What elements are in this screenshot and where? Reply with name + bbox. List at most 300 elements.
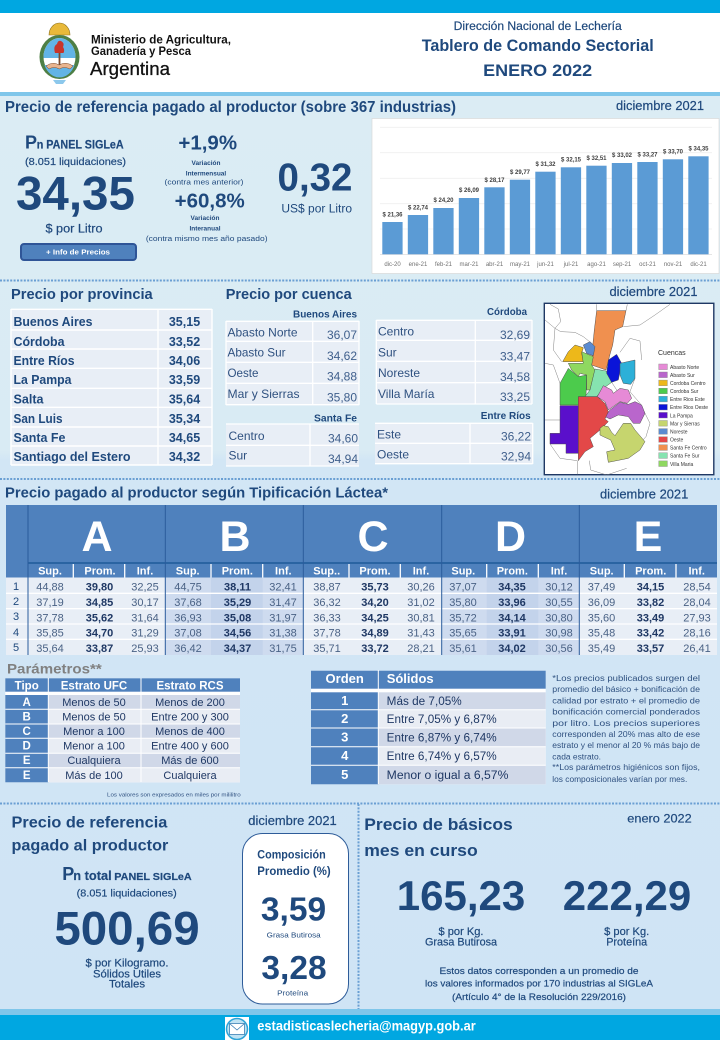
- note: data source: (Artículo 4° de la Resolución 229/2016): [452, 992, 626, 1003]
- date: section 3: diciembre 2021: [600, 487, 688, 501]
- table: Córdoba basins: Noreste: [378, 366, 420, 380]
- row 3 values: 36,93: [174, 612, 202, 624]
- footnote: price methodology: los composicionales varían por mes.: [552, 775, 687, 784]
- map: dairy basins: Mar y Sierras: [670, 421, 700, 427]
- row 1 values: 37,07: [449, 582, 477, 594]
- kpi: monthly variation: [164, 131, 244, 187]
- table: Córdoba basins: 34,58: [500, 370, 530, 384]
- footnote: price methodology: promedio del básico + bonificación de: [552, 685, 701, 694]
- kpi: price per kilogram: (8.051 liquidaciones): [77, 888, 177, 900]
- bar chart: monthly price: feb-21: [435, 262, 453, 268]
- table: price by typing: E: [634, 513, 662, 561]
- row 5 values: 31,75: [269, 643, 297, 655]
- kpi: US dollars per litre: 0,32: [278, 157, 352, 200]
- table: price by province: Buenos Aires: [14, 315, 93, 329]
- table: solids order: Más de 7,05%: [387, 696, 462, 708]
- header title: Tablero de Comando Sectorial: [422, 37, 654, 55]
- bar chart: monthly price: ene-21: [409, 262, 428, 268]
- table: price by typing: Sup.: [176, 566, 200, 578]
- table: Entre Ríos basins: Oeste: [377, 448, 409, 462]
- row 4 values: 31,43: [407, 628, 435, 640]
- table: Córdoba basins: Villa María: [378, 387, 435, 401]
- bar chart: monthly price: $ 29,77: [510, 170, 531, 176]
- row 4 values: 34,56: [224, 628, 251, 640]
- table: price by typing: Inf.: [275, 566, 292, 578]
- footer email address: estadisticaslecheria@magyp.gob.ar: [257, 1018, 476, 1034]
- heading: total reference price: Precio de referencia: [12, 814, 168, 831]
- table: Córdoba basins: [376, 306, 532, 404]
- row 2 values: 34,20: [361, 597, 389, 609]
- row 1 values: [36, 582, 711, 594]
- footnote: price methodology: estrato y el menor al 20 % más bajo de: [552, 741, 701, 750]
- table: price by province: 34,65: [169, 431, 200, 445]
- table: price by typing: Prom.: [359, 566, 391, 578]
- row 1 values: 38,11: [224, 582, 251, 594]
- map: dairy basins: Cordoba Sur: [670, 389, 699, 395]
- row 4 values: 37,78: [313, 628, 341, 640]
- kpi: protein basic price: [563, 872, 691, 949]
- header band: [0, 0, 720, 96]
- row 3 values: 34,14: [498, 612, 527, 624]
- map: dairy basins: Santa Fe Sur: [670, 454, 700, 460]
- row 1 values: 37,49: [588, 582, 615, 594]
- table: Córdoba basins: Centro: [378, 324, 414, 338]
- bar chart: monthly price: $ 21,36: [382, 212, 403, 218]
- date: section 1: diciembre 2021: [616, 99, 704, 113]
- table: price by province: Entre Ríos: [14, 354, 75, 368]
- footnote: price methodology: calidad por estrato + el promedio de: [552, 696, 701, 705]
- table: price by typing: Prom.: [84, 566, 116, 578]
- row 1 values: 32,41: [269, 582, 297, 594]
- map: dairy basins: Entre Rios Este: [670, 397, 705, 403]
- table: solids order: Menor o igual a 6,57%: [387, 770, 508, 782]
- table: solids order: Orden: [326, 671, 364, 686]
- row 4 values: 34,70: [86, 628, 113, 640]
- table: Entre Ríos basins: Este: [377, 428, 401, 442]
- bar chart: monthly price: $ 26,09: [459, 188, 480, 194]
- heading: basic prices: [364, 816, 513, 860]
- map: dairy basins: Villa Maria: [670, 462, 693, 468]
- table: parameters: E: [23, 770, 31, 782]
- row 4 values: 30,98: [545, 628, 573, 640]
- row 4 values: 35,65: [449, 628, 477, 640]
- table: price by province: 35,34: [169, 412, 200, 426]
- row 2 values: 37,68: [174, 597, 202, 609]
- row 1 values: 28,54: [683, 582, 711, 594]
- table: Santa Fe basins: Centro: [228, 429, 265, 443]
- table: price by typing: Inf.: [137, 566, 153, 578]
- icon: email: [225, 1017, 249, 1040]
- ministry wordmark: Ganadería y Pesca: [91, 44, 191, 58]
- bar chart: monthly price: $ 33,27: [637, 152, 658, 158]
- heading: price by basin: Precio por cuenca: [226, 286, 352, 303]
- bar chart: monthly price: $ 33,70: [663, 150, 684, 156]
- table: parameters: Cualquiera: [67, 755, 121, 767]
- table: price by province: Salta: [14, 392, 45, 406]
- panel: average composition: 3,28: [261, 950, 327, 987]
- table: price by province: 35,64: [169, 392, 200, 406]
- table: Córdoba basins: Sur: [378, 346, 397, 360]
- kpi: price per kilogram: $ por Kilogramo.: [86, 958, 168, 970]
- map: dairy basins: Abasto Sur: [670, 373, 695, 379]
- panel: average composition: Grasa Butirosa: [267, 931, 322, 940]
- panel: average composition: [242, 834, 348, 1004]
- row 3 values: 35,62: [86, 612, 113, 624]
- header title: Dirección Nacional de Lechería: [454, 21, 622, 33]
- table: parameters: Entre 200 y 300: [151, 712, 229, 724]
- row 1 values: 34,15: [637, 582, 664, 594]
- table: Buenos Aires basins: 35,80: [327, 390, 357, 404]
- table: price by typing: [6, 505, 717, 655]
- kpi: butterfat basic price: $ por Kg.: [438, 926, 484, 938]
- date: section 5: diciembre 2021: [248, 814, 337, 828]
- bar chart: monthly price: $ 22,74: [408, 206, 429, 212]
- table: solids order: 3: [341, 730, 348, 744]
- bar chart: monthly price: jun-21: [536, 262, 554, 268]
- footnote: price methodology: bonificación comercial ponderados: [552, 707, 700, 716]
- footnote: units: Los valores son expresados en miles por mililitro: [107, 793, 241, 799]
- kpi: price per kilogram: 500,69: [54, 902, 200, 955]
- row 5 values: 26,41: [683, 643, 711, 655]
- row 4 values: 35,48: [588, 628, 615, 640]
- table: Córdoba basins: 33,25: [500, 390, 530, 404]
- table: solids order: 2: [341, 711, 348, 726]
- table: solids order: Entre 7,05% y 6,87%: [387, 714, 497, 726]
- row 1 values: 35,73: [361, 582, 389, 594]
- map: dairy basins: Cordoba Centro: [670, 381, 706, 387]
- table: Córdoba basins: 32,69: [500, 328, 530, 342]
- panel: average composition: Composición: [257, 849, 326, 861]
- row 3 values: 34,25: [361, 612, 389, 624]
- table: Entre Ríos basins: Entre Ríos: [481, 410, 531, 422]
- row 2 values: 30,55: [545, 597, 573, 609]
- table: price by province: Córdoba: [14, 335, 66, 349]
- table: Buenos Aires basins: Abasto Norte: [228, 326, 298, 340]
- row 4 values: 37,08: [174, 628, 202, 640]
- table: price by typing: Prom.: [497, 566, 528, 578]
- table: solids order: [311, 670, 546, 784]
- table: price by province: 33,52: [169, 335, 200, 349]
- heading: total reference price: pagado al productor: [12, 838, 168, 855]
- table: Santa Fe basins: [226, 413, 359, 466]
- row 4 values: 31,38: [269, 628, 297, 640]
- kpi: butterfat basic price: Grasa Butirosa: [425, 937, 498, 949]
- table: Entre Ríos basins: 36,22: [501, 430, 531, 444]
- row 3 values: 31,97: [269, 612, 297, 624]
- heading: basic prices: Precio de básicos: [364, 816, 513, 834]
- table: Buenos Aires basins: Oeste: [228, 366, 259, 380]
- table: parameters: Cualquiera: [163, 770, 217, 782]
- table: parameters: Más de 600: [161, 755, 219, 767]
- bar chart: monthly price: nov-21: [664, 262, 683, 268]
- row 4 values: 28,16: [683, 628, 711, 640]
- footnote: price methodology: cada estrato.: [552, 752, 601, 761]
- row 2 values: 33,82: [637, 597, 664, 609]
- map: dairy basins: Oeste: [670, 438, 684, 444]
- table: parameters: Menos de 50: [62, 697, 126, 709]
- row 1 values: 44,75: [174, 582, 202, 594]
- table: price by typing: Inf.: [413, 566, 429, 578]
- row 3 values: 30,80: [545, 612, 573, 624]
- row 2 values: 37,19: [36, 597, 64, 609]
- row 1 values: 32,25: [131, 582, 159, 594]
- table: parameters: Menos de 400: [155, 726, 225, 738]
- kpi: butterfat basic price: 165,23: [397, 872, 525, 919]
- row 3 values: 35,60: [588, 612, 615, 624]
- table: price by typing: Inf.: [688, 566, 705, 578]
- row 2 values: [36, 597, 711, 609]
- heading: price by province: Precio por provincia: [11, 286, 153, 303]
- table: parameters: Entre 400 y 600: [151, 740, 229, 752]
- table: parameters: Tipo: [15, 680, 39, 692]
- ministry wordmark: [90, 32, 231, 79]
- table: price by province: 34,32: [169, 450, 200, 464]
- bar chart: monthly price: $ 33,02: [612, 153, 633, 159]
- table: price by typing: B: [219, 513, 251, 561]
- row 5 values: 35,61: [449, 643, 477, 655]
- kpi: price per kilogram: PANEL SIGLeA: [114, 871, 192, 883]
- bar chart: monthly price: ago-21: [587, 262, 607, 268]
- table: price by typing: Prom.: [635, 566, 666, 578]
- kpi: monthly variation: Variación: [192, 160, 220, 167]
- note: data source: los valores informados por 170 industrias al SIGLeA: [425, 979, 654, 990]
- row 5 values: 33,87: [86, 643, 113, 655]
- table: price by typing: Sup..: [313, 566, 340, 578]
- heading: price by milk typing: Precio pagado al productor según Tipificación Láctea*: [5, 486, 388, 502]
- row 3 values: 36,33: [313, 612, 341, 624]
- row 5 values: 30,56: [545, 643, 573, 655]
- bar chart: monthly price: sep-21: [613, 262, 632, 268]
- table: Santa Fe basins: Santa Fe: [314, 413, 357, 425]
- map: dairy basins: La Pampa: [670, 413, 693, 419]
- bar chart: monthly price: mar-21: [459, 262, 479, 268]
- bar chart: monthly price: abr-21: [486, 262, 504, 268]
- row 4 values: 34,89: [361, 628, 389, 640]
- table: price by typing: Inf.: [551, 566, 567, 578]
- row 3 values: 35,72: [449, 612, 477, 624]
- heading: total reference price: [12, 814, 168, 855]
- row 3 values: [36, 612, 711, 624]
- date: section 2: diciembre 2021: [610, 285, 698, 299]
- table: price by province: 34,06: [169, 354, 200, 368]
- table: price by province: Santa Fe: [14, 431, 66, 445]
- bar chart: monthly price: [372, 118, 719, 274]
- ministry wordmark: Argentina: [90, 59, 171, 79]
- table: Entre Ríos basins: 32,94: [501, 450, 531, 464]
- table: price by province: La Pampa: [14, 373, 73, 387]
- table: parameters: C: [23, 726, 31, 738]
- footnote: price methodology: [552, 674, 701, 784]
- row 1 values: 44,88: [36, 582, 64, 594]
- row 5 values: 25,93: [131, 643, 159, 655]
- row 3 values: 27,93: [683, 612, 711, 624]
- row 1 values: 30,26: [407, 582, 435, 594]
- bar chart: monthly price: $ 32,15: [561, 158, 582, 164]
- ministry wordmark: Ministerio de Agricultura,: [91, 32, 231, 46]
- table: parameters: E: [23, 755, 31, 767]
- row 5 values: 35,49: [588, 643, 615, 655]
- kpi: price per kilogram: [54, 864, 200, 991]
- row 2 values: 28,04: [683, 597, 711, 609]
- table: price by typing: 5: [13, 642, 19, 654]
- row 3 values: 37,78: [36, 612, 64, 624]
- row 5 values: 33,72: [361, 643, 389, 655]
- kpi: monthly variation: (contra mes anterior): [164, 180, 244, 187]
- kpi: price per kilogram: Totales: [109, 979, 146, 991]
- table: Santa Fe basins: 34,60: [328, 432, 358, 446]
- heading: parameters: Parámetros**: [7, 660, 102, 676]
- table: solids order: 4: [341, 748, 349, 763]
- kpi: annual variation: [146, 189, 268, 243]
- bar chart: monthly price: $ 24,20: [433, 198, 454, 204]
- row 1 values: 38,87: [313, 582, 341, 594]
- table: Santa Fe basins: 34,94: [328, 452, 358, 466]
- table: price by typing: 4: [13, 627, 19, 639]
- row 5 values: 35,64: [36, 643, 64, 655]
- row 3 values: 35,08: [224, 612, 251, 624]
- table: parameters: Estrato RCS: [156, 680, 224, 692]
- panel: average composition: Promedio (%): [257, 866, 331, 878]
- kpi: annual variation: (contra mismo mes año pasado): [146, 236, 268, 243]
- table: price by province: Santiago del Estero: [14, 450, 131, 464]
- row 4 values: 33,42: [637, 628, 664, 640]
- row 2 values: 36,09: [588, 597, 615, 609]
- row 5 values: 33,57: [637, 643, 664, 655]
- kpi: monthly variation: +1,9%: [178, 131, 237, 154]
- table: price by typing: Sup.: [590, 566, 614, 578]
- row 5 values: 34,37: [224, 643, 251, 655]
- table: price by province: 35,15: [169, 315, 200, 329]
- footnote: price methodology: *Los precios publicados surgen del: [552, 674, 700, 683]
- header title: [422, 21, 654, 80]
- table: Córdoba basins: Córdoba: [487, 306, 527, 318]
- table: parameters: A: [23, 697, 31, 709]
- kpi: butterfat basic price: [397, 872, 525, 949]
- footnote: price methodology: por litro. Los precios superiores: [552, 719, 700, 728]
- footnote: price methodology: corresponden al 20% mas alto de ese: [552, 730, 701, 739]
- bar chart: monthly price: $ 32,51: [586, 156, 607, 162]
- row 3 values: 31,64: [131, 612, 159, 624]
- row 4 values: 31,29: [131, 628, 159, 640]
- row 2 values: 35,80: [449, 597, 477, 609]
- table: Santa Fe basins: Sur: [228, 448, 247, 462]
- row 2 values: 31,02: [407, 597, 435, 609]
- table: price by typing: D: [495, 513, 526, 561]
- kpi: US dollars per litre: US$ por Litro: [281, 204, 352, 216]
- bar chart: monthly price: $ 31,32: [535, 162, 556, 168]
- bar chart: monthly price: $ 34,35: [688, 146, 709, 152]
- table: parameters: Menos de 200: [155, 697, 225, 709]
- note: data source: Estos datos corresponden a un promedio de: [440, 966, 638, 977]
- table: price by typing: 1: [13, 581, 19, 593]
- row 2 values: 31,47: [269, 597, 297, 609]
- map: dairy basins: Noreste: [670, 430, 688, 436]
- row 4 values: 35,85: [36, 628, 64, 640]
- bar chart: monthly price: jul-21: [563, 262, 579, 268]
- kpi: price per litre: n PANEL SIGLeA: [37, 140, 124, 152]
- row 5 values: 36,42: [174, 643, 202, 655]
- row 1 values: 34,35: [498, 582, 526, 594]
- heading: basic prices: mes en curso: [364, 842, 478, 860]
- row 5 values: 28,21: [407, 643, 435, 655]
- row 5 values: [36, 643, 711, 655]
- table: solids order: Sólidos: [387, 671, 434, 686]
- table: Buenos Aires basins: 34,62: [327, 349, 357, 363]
- table: solids order: Entre 6,74% y 6,57%: [387, 751, 497, 763]
- row 4 values: [36, 628, 711, 640]
- row 2 values: 33,96: [498, 597, 526, 609]
- table: Buenos Aires basins: Abasto Sur: [228, 346, 286, 360]
- kpi: annual variation: Interanual: [189, 226, 221, 233]
- table: Buenos Aires basins: 34,88: [327, 370, 357, 384]
- icon: national coat of arms: [40, 23, 80, 84]
- kpi: price per kilogram: P: [62, 864, 74, 884]
- table: price by typing: 3: [13, 611, 19, 623]
- table: parameters: D: [23, 740, 31, 752]
- kpi: price per litre: [16, 132, 135, 236]
- row 2 values: 30,17: [131, 597, 159, 609]
- table: parameters: Estrato UFC: [61, 680, 127, 692]
- heading: reference price: Precio de referencia pagado al productor (sobre 367 industrias): [5, 99, 456, 116]
- table: price by typing: A: [81, 513, 113, 561]
- row 2 values: 36,32: [313, 597, 341, 609]
- row 5 values: 34,02: [498, 643, 526, 655]
- date: section 6: enero 2022: [627, 812, 692, 826]
- bar chart: monthly price: may-21: [510, 262, 531, 268]
- map: dairy basins: [544, 303, 714, 475]
- kpi: protein basic price: $ por Kg.: [604, 926, 649, 938]
- bar chart: monthly price: $ 28,17: [484, 178, 505, 184]
- map: dairy basins: Santa Fe Centro: [670, 446, 707, 452]
- row 4 values: 33,91: [498, 628, 526, 640]
- kpi: protein basic price: Proteína: [606, 937, 648, 949]
- row 1 values: 30,12: [545, 582, 573, 594]
- table: price by typing: 2: [13, 596, 19, 608]
- header title: ENERO 2022: [483, 61, 592, 80]
- bar chart: monthly price: dic-20: [384, 262, 401, 268]
- table: price by province: [11, 309, 212, 465]
- table: parameters: Menos de 50: [62, 712, 126, 724]
- map: dairy basins: Entre Rios Oeste: [670, 405, 708, 411]
- table: Entre Ríos basins: [375, 410, 533, 464]
- row 3 values: 33,49: [637, 612, 664, 624]
- table: Buenos Aires basins: [226, 308, 359, 405]
- footnote: price methodology: **Los parámetros higiénicos son fijos,: [552, 763, 700, 772]
- row 5 values: 35,71: [313, 643, 341, 655]
- table: parameters: B: [23, 712, 31, 724]
- kpi: price per kilogram: n total: [73, 868, 112, 883]
- kpi: protein basic price: 222,29: [563, 872, 691, 919]
- kpi: price per litre: 34,35: [16, 168, 135, 220]
- table: price by province: San Luis: [14, 412, 63, 426]
- table: solids order: 1: [341, 693, 348, 708]
- button: more price info: [21, 244, 136, 260]
- table: Córdoba basins: 33,47: [500, 350, 530, 364]
- button: more price info: + Info de Precios: [46, 248, 110, 256]
- table: price by province: 33,59: [169, 373, 200, 387]
- table: solids order: Entre 6,87% y 6,74%: [387, 732, 497, 744]
- table: Buenos Aires basins: 36,07: [327, 328, 357, 342]
- kpi: price per kilogram: Sólidos Utiles: [93, 968, 162, 980]
- kpi: monthly variation: Intermensual: [186, 171, 226, 178]
- kpi: price per litre: P: [25, 132, 37, 152]
- table: price by typing: Sup.: [38, 566, 62, 578]
- table: Buenos Aires basins: Buenos Aires: [293, 308, 357, 320]
- row 1 values: 39,80: [86, 582, 113, 594]
- kpi: annual variation: Variación: [191, 215, 219, 222]
- footer band: [0, 1009, 720, 1040]
- table: price by typing: C: [357, 513, 389, 561]
